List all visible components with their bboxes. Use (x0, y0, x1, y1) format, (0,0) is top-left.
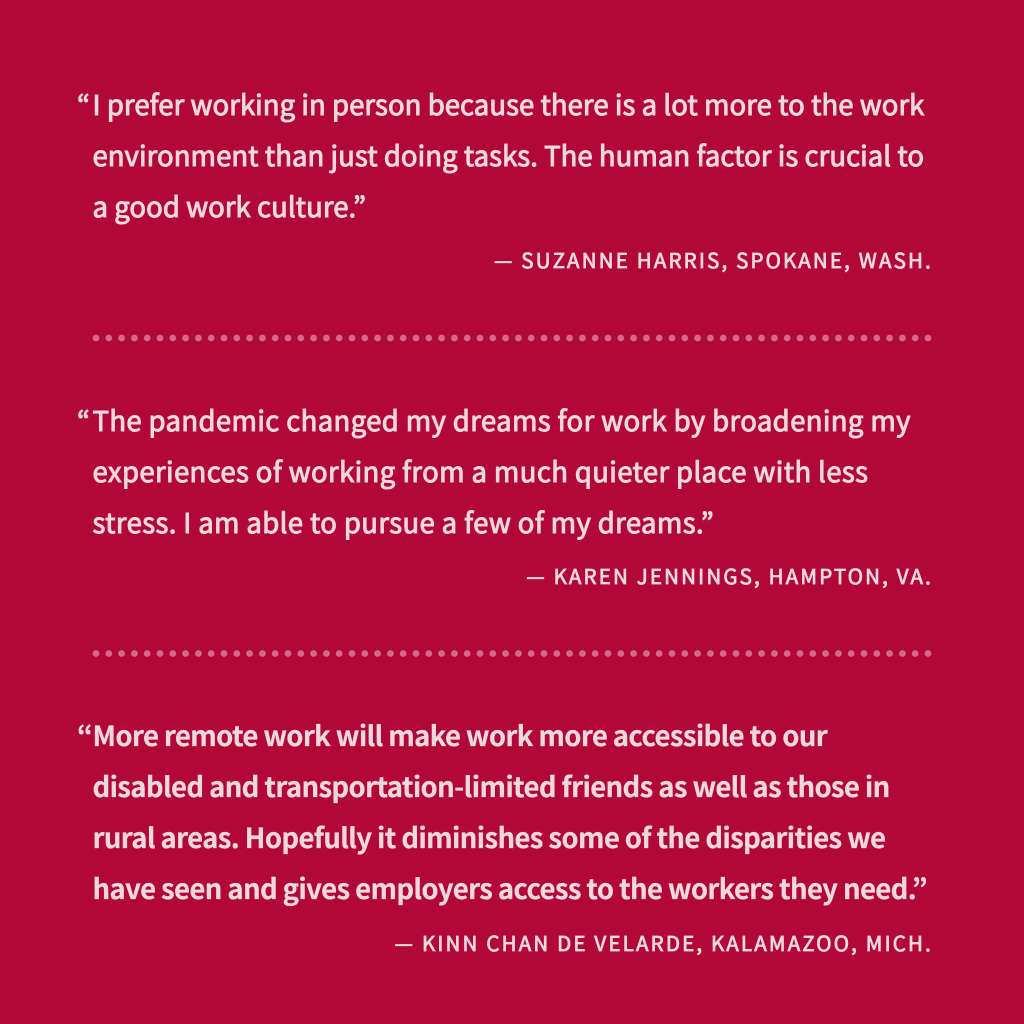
quote 3 text: disabled and transportation-limited friends as well as those in (92, 765, 890, 805)
quote 2 text: stress. I am able to pursue a few of my dreams.” (92, 501, 714, 541)
quote 3 text: have seen and gives employers access to the workers they need.” (92, 867, 927, 907)
quote 2 (77, 399, 933, 590)
quote 2 text: The pandemic changed my dreams for work by broadening my (92, 399, 911, 439)
quote 1 text: environment than just doing tasks. The human factor is crucial to (92, 134, 924, 174)
dotted divider 1 (96, 335, 929, 341)
quote 1 text: a good work culture.” (92, 185, 366, 225)
quote 1 text: “ (77, 83, 90, 123)
quote 3 (77, 714, 933, 957)
quote 1 text: I prefer working in person because there is a lot more to the work (92, 83, 924, 123)
quote 1 text (77, 83, 924, 225)
quote 2 text: experiences of working from a much quieter place with less (92, 450, 868, 490)
dotted divider 2 (96, 650, 929, 657)
attribution 3: — KINN CHAN DE VELARDE, KALAMAZOO, MICH. (395, 927, 933, 957)
quote 3 text: More remote work will make work more accessible to our (92, 714, 829, 754)
quote 3 text: rural areas. Hopefully it diminishes some of the disparities we (92, 816, 885, 856)
quote 1 (77, 83, 933, 274)
quote 3 text: “ (77, 714, 92, 754)
quote 2 text (77, 399, 911, 541)
attribution 1: — SUZANNE HARRIS, SPOKANE, WASH. (494, 244, 933, 274)
quote 3 text (77, 714, 927, 907)
attribution 2: — KAREN JENNINGS, HAMPTON, VA. (526, 560, 933, 590)
quote 2 text: “ (77, 399, 90, 439)
